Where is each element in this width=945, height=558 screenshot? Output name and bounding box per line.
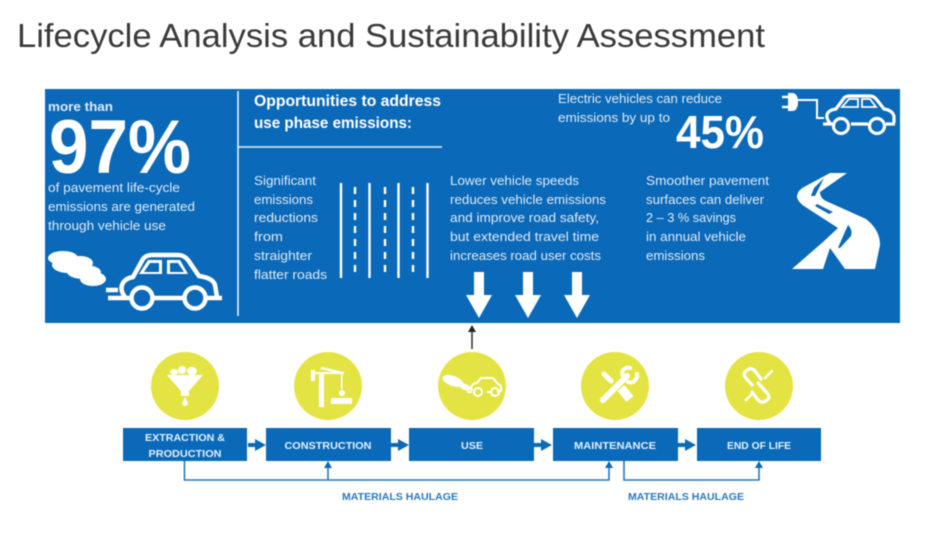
stage: maintenance: MAINTENANCE — [574, 440, 656, 452]
text: smoother pavement: emissions — [646, 249, 705, 263]
icon: exhaust smoke — [48, 251, 106, 286]
text: electric vehicles: 45% — [676, 106, 764, 158]
text: more than 97%: 97% — [49, 105, 191, 190]
stage: maintenance — [553, 352, 678, 461]
text: lower vehicle speeds: reduces vehicle emissions — [450, 193, 606, 207]
text: straighter flatter roads: emissions — [254, 193, 313, 207]
heading: opportunities: Opportunities to address — [254, 93, 441, 110]
arrows between stages — [248, 439, 696, 451]
icon: car with exhaust — [106, 255, 222, 308]
label: materials haulage right: MATERIALS HAULAGE — [628, 491, 744, 503]
stage: extraction and production — [123, 352, 247, 461]
heading: opportunities — [254, 93, 441, 132]
label: materials haulage left: MATERIALS HAULAGE — [342, 491, 458, 503]
stage: extraction and production: PRODUCTION — [148, 448, 222, 460]
stage: use — [409, 352, 534, 461]
text: straighter flatter roads: reductions — [254, 211, 318, 225]
text: electric vehicles: Electric vehicles can reduce — [558, 92, 722, 106]
panel: use phase emissions — [45, 89, 900, 323]
stage: end of life: END OF LIFE — [727, 440, 791, 452]
text: straighter flatter roads — [254, 174, 327, 282]
text: smoother pavement: 2 – 3 % savings — [646, 211, 736, 225]
text: lower vehicle speeds: and improve road safety, — [450, 211, 599, 225]
icon: smoke and small car — [441, 373, 501, 396]
text: lower vehicle speeds: increases road user costs — [450, 249, 601, 263]
text: smoother pavement — [646, 174, 770, 263]
icon: wrench and screwdriver — [603, 368, 637, 400]
stage: construction: CONSTRUCTION — [284, 440, 372, 452]
text: lower vehicle speeds: Lower vehicle speeds — [450, 174, 579, 188]
connector: materials haulage maintenance to end of life — [624, 461, 763, 480]
text: smoother pavement: in annual vehicle — [646, 230, 746, 244]
text: more than 97% — [48, 100, 195, 233]
arrow: use to panel — [468, 325, 476, 349]
text: more than 97%: emissions are generated — [48, 200, 195, 214]
text: electric vehicles — [558, 92, 764, 158]
icon: plug and electric car — [782, 93, 895, 134]
heading: opportunities: use phase emissions: — [254, 115, 412, 132]
text: straighter flatter roads: Significant — [254, 174, 317, 188]
stage: extraction and production: EXTRACTION & — [145, 432, 225, 444]
icon: broken chain link — [744, 369, 772, 402]
icon: crane — [311, 367, 352, 407]
icon: straight road lines — [341, 183, 428, 278]
text: smoother pavement: surfaces can deliver — [646, 193, 764, 207]
text: straighter flatter roads: from — [254, 230, 283, 244]
text: lower vehicle speeds: but extended travel time — [450, 230, 599, 244]
text: more than 97%: through vehicle use — [48, 219, 166, 233]
text: electric vehicles: emissions by up to — [558, 111, 670, 125]
text: straighter flatter roads: flatter roads — [254, 268, 327, 282]
text: more than 97%: of pavement life-cycle — [48, 181, 180, 195]
icon: three down arrows — [466, 272, 590, 318]
text: more than 97%: more than — [48, 100, 113, 114]
text: straighter flatter roads: straighter — [254, 249, 312, 263]
title: Lifecycle Analysis and Sustainability Assessment — [17, 17, 765, 54]
icon: funnel — [167, 366, 203, 406]
text: lower vehicle speeds — [450, 174, 606, 263]
stage: use: USE — [461, 440, 483, 452]
stage: construction — [266, 352, 391, 461]
text: smoother pavement: Smoother pavement — [646, 174, 770, 188]
connector: materials haulage extraction to construction and maintenance — [184, 461, 613, 480]
icon: winding road — [792, 173, 880, 269]
stage: end of life — [697, 352, 821, 461]
